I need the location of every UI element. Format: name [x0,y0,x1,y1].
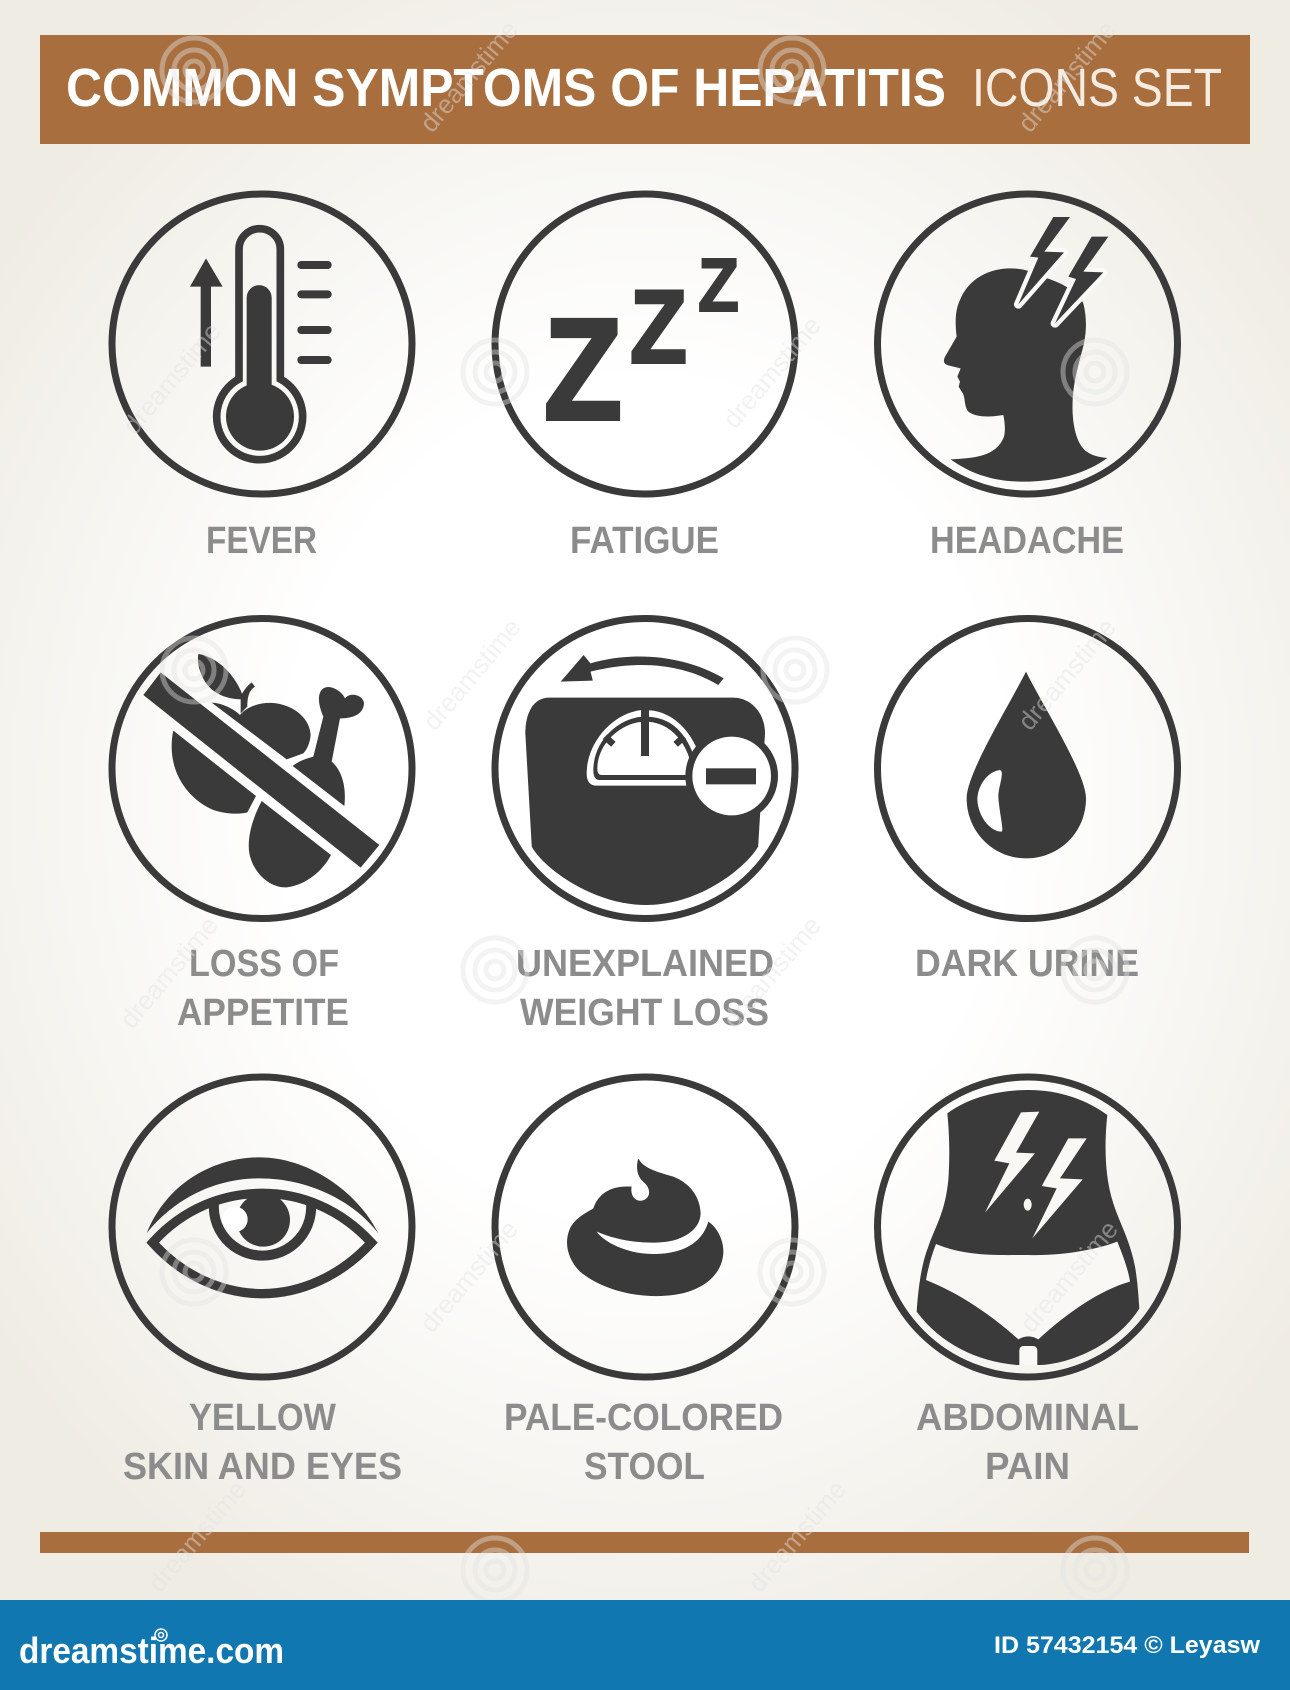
panel: pale-colored stool [495,1077,795,1488]
label: abdominal pain: ABDOMINAL [916,1397,1139,1439]
label: unexplained weight loss: UNEXPLAINED [516,943,774,985]
watermarks: dreamstime [414,15,524,138]
footer: image id: ID 57432154 © Leyasw [994,1632,1260,1659]
watermarks [114,15,1127,1602]
panel: loss of appetite [112,618,412,1034]
label: loss of appetite: APPETITE [177,992,349,1034]
icon: sleep letters: Z [630,270,687,386]
icon: minus badge [685,730,778,822]
watermarks: dreamstime [717,911,827,1034]
icon ring [878,1077,1178,1377]
label: fever: FEVER [206,520,317,562]
label: abdominal pain [916,1397,1139,1488]
icon: abdomen with lightning [917,1090,1139,1365]
panel: headache [878,194,1178,562]
icon ring [495,1077,795,1377]
icon: thermometer [217,229,328,460]
icon ring [878,618,1178,918]
footer band [0,1600,1290,1690]
watermarks: dreamstime [717,311,827,434]
watermarks: dreamstime [1012,613,1122,736]
watermarks: dreamstime [742,1475,852,1598]
title: icons set: ICONS SET [972,58,1222,118]
title: main heading: COMMON SYMPTOMS OF HEPATITIS [66,58,946,118]
label: yellow skin and eyes: SKIN AND EYES [123,1446,402,1488]
panel: dark urine [878,618,1178,985]
icon ring [495,618,795,918]
footer: site logo text: dreamstime.com [19,1630,284,1671]
label: yellow skin and eyes: YELLOW [189,1397,336,1439]
bottom divider bar [40,1532,1249,1553]
icon: sleep letters: Z [544,289,622,450]
label: abdominal pain: PAIN [985,1446,1070,1488]
label: dark urine: DARK URINE [915,943,1139,985]
icon ring [112,1077,412,1377]
watermarks: dreamstime [417,613,527,736]
icon: eye [147,1157,378,1294]
icon ring [878,194,1178,494]
icon: weighing scale body and arrow [525,655,765,905]
panel: fever [112,194,412,562]
label: unexplained weight loss: WEIGHT LOSS [520,992,769,1034]
watermarks: dreamstime [1014,1215,1124,1338]
footer: logo swirl [155,1629,167,1641]
panel: fatigue [495,194,795,562]
label: loss of appetite: LOSS OF [189,943,339,985]
icon ring [112,618,412,918]
icon: head [944,268,1107,482]
watermarks: dreamstime [1012,15,1122,138]
panel: abdominal pain [878,1077,1178,1488]
panel: unexplained weight loss [495,618,795,1034]
watermarks: dreamstime [117,317,227,440]
panel: yellow skin and eyes [112,1077,412,1488]
icon: sleep letters [544,243,739,450]
icon: up arrow [190,258,223,367]
icon ring [495,194,795,494]
watermarks: dreamstime [414,1215,524,1338]
icon: crossed-out food [143,654,379,887]
title banner [40,35,1250,144]
icon: lightning bolts [1018,217,1108,323]
icon: drop [967,672,1086,858]
label: fatigue: FATIGUE [570,520,719,562]
label: pale-colored stool [504,1397,783,1488]
icon ring [112,194,412,494]
label: yellow skin and eyes [123,1397,402,1488]
watermarks: dreamstime [142,1475,252,1598]
icon: scale dial [587,710,778,822]
watermarks: dreamstime [114,911,224,1034]
icon: sleep letters: Z [698,243,739,327]
label: loss of appetite [177,943,349,1034]
label: headache: HEADACHE [930,520,1124,562]
label: unexplained weight loss [516,943,774,1034]
label: pale-colored stool: STOOL [584,1446,705,1488]
icon: stool [567,1158,723,1296]
label: pale-colored stool: PALE-COLORED [504,1397,783,1439]
